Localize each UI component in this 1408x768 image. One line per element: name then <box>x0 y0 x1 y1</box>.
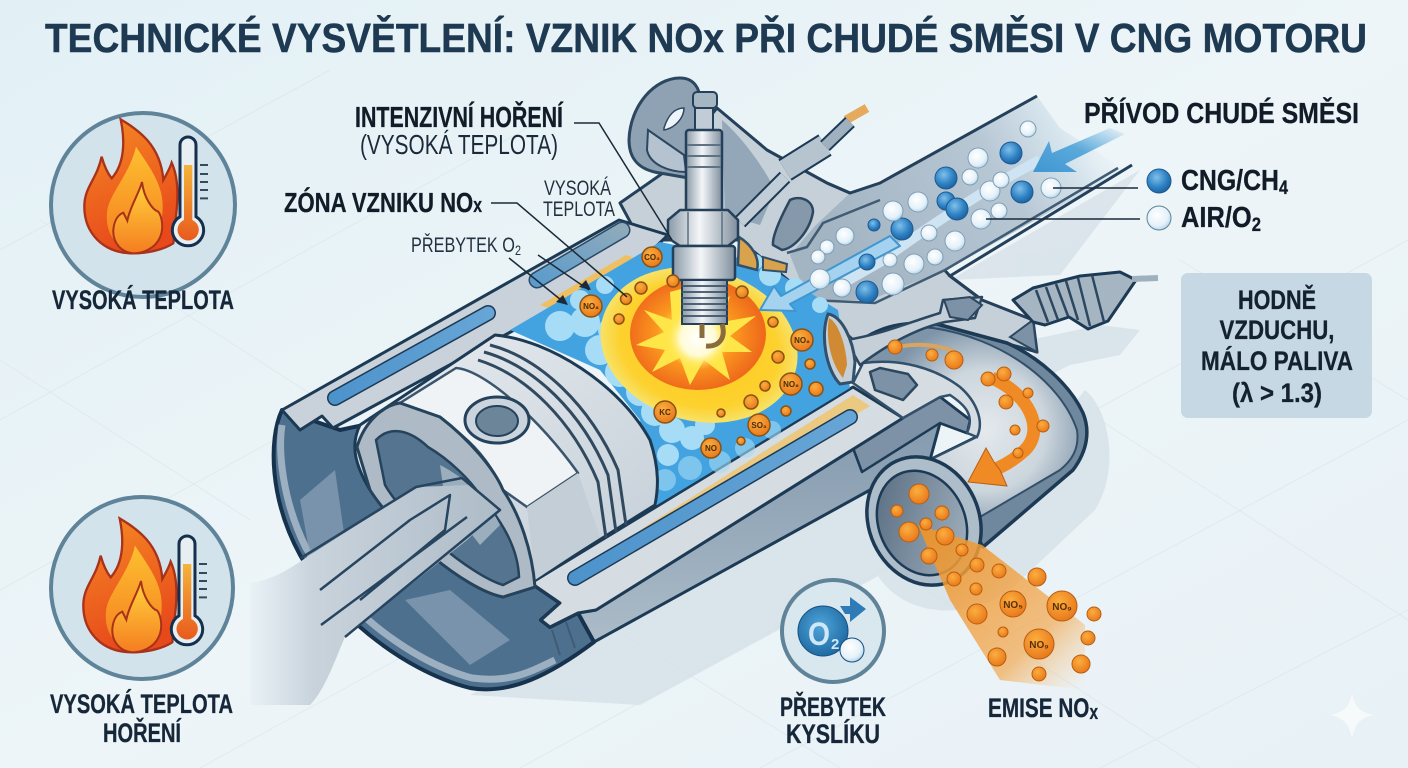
cylinder shell opening <box>274 400 594 689</box>
sensor and wire <box>740 108 867 222</box>
legend: CNG and air: CNG/CH <box>1181 165 1295 197</box>
callout: high temperature small: TEPLOTA <box>543 198 615 221</box>
exhaust flare <box>846 438 1002 604</box>
piston rings <box>478 345 626 538</box>
combustion chamber <box>510 242 850 505</box>
panel: lots of air, little fuel <box>1181 273 1372 418</box>
piston skirt face <box>400 368 578 507</box>
emitted NOx labels: NO₅ <box>1003 600 1023 611</box>
legend: CNG and air: 2 <box>1252 215 1261 236</box>
legend: CNG and air: 4 <box>1279 178 1288 199</box>
callout: high temperature small <box>543 177 615 221</box>
cylinder shell highlights <box>300 470 510 665</box>
callout: intensive combustion: INTENZIVNÍ HOŘENÍ <box>355 100 564 134</box>
blue slot: lower wall <box>575 417 850 578</box>
callout: excess oxygen small <box>411 234 591 305</box>
particle labels in chamber <box>583 253 810 453</box>
spark plug <box>668 92 738 346</box>
particle labels in chamber: NO <box>705 444 717 453</box>
particle labels in chamber: CO₃ <box>644 253 660 262</box>
label: high temperature: VYSOKÁ TEPLOTA <box>52 284 234 315</box>
panel: lots of air, little fuel: VZDUCHU, <box>1220 315 1334 345</box>
icon: excess oxygen: 2 <box>831 636 839 653</box>
exhaust plume <box>918 525 1085 690</box>
callout: intensive combustion <box>355 100 672 240</box>
arrow: mixture entering the cylinder <box>760 236 900 311</box>
piston pin hole <box>465 397 529 443</box>
connecting rod <box>250 478 500 705</box>
intake air flow and bubbles <box>760 121 1061 311</box>
label: combustion high temperature: HOŘENÍ <box>103 717 182 748</box>
exhaust pipe <box>853 323 1087 547</box>
label: excess oxygen: PŘEBYTEK <box>780 691 886 722</box>
lower cylinder wall <box>550 397 970 665</box>
label: excess oxygen: KYSLÍKU <box>786 718 880 749</box>
particle labels in chamber: NO₈ <box>783 380 799 389</box>
watermark sparkle <box>1330 693 1374 738</box>
particle labels in chamber: KC <box>659 408 671 417</box>
legend: CNG and air: AIR/O <box>1181 202 1262 234</box>
lower wall top face <box>531 387 903 627</box>
particle labels in chamber: SO₃ <box>751 421 767 430</box>
label: NOx emissions: x <box>1089 702 1098 724</box>
intake pipe <box>787 96 1132 303</box>
panel: lots of air, little fuel: MÁLO PALIVA <box>1201 345 1353 376</box>
legend: CNG and air <box>986 165 1288 236</box>
emitted NOx labels: NO₉ <box>1052 602 1072 613</box>
callout: NOx formation zone <box>284 187 627 297</box>
particle labels in chamber: NO₈ <box>583 302 599 311</box>
foam: cool air bubbles <box>545 254 828 491</box>
curved flow arrow <box>895 345 1034 486</box>
head dome <box>722 120 775 225</box>
panel: lots of air, little fuel: (λ > 1.3) <box>1232 378 1322 408</box>
icon: excess oxygen: O <box>808 616 830 652</box>
callout: excess oxygen small: PŘEBYTEK O <box>411 234 545 257</box>
piston ring opening <box>357 403 535 597</box>
callout: excess oxygen small: 2 <box>515 242 521 258</box>
label: excess oxygen <box>780 691 886 749</box>
flange behind the spark plug <box>629 78 700 180</box>
panel: lots of air, little fuel: HODNĚ <box>1238 284 1316 315</box>
label: combustion high temperature <box>50 688 233 748</box>
intake valve <box>738 237 787 272</box>
label: combustion high temperature: VYSOKÁ TEPLOTA <box>50 688 233 719</box>
emitted NOx labels: NO₉ <box>1029 640 1049 651</box>
engine shadow <box>470 170 1140 705</box>
upper cylinder wall <box>282 220 668 430</box>
icon: excess oxygen <box>782 580 884 682</box>
callout: high temperature small: VYSOKÁ <box>544 177 611 200</box>
piston <box>355 335 657 597</box>
NOx particles in exhaust <box>888 340 1101 681</box>
icon: combustion high temperature (bottom) <box>51 497 233 679</box>
arrow: lean mixture intake <box>1033 128 1125 172</box>
emitted NOx labels <box>1003 600 1072 651</box>
exhaust hose connector <box>1010 272 1158 352</box>
heading: lean mixture intake: PŘÍVOD CHUDÉ SMĚSI <box>1084 96 1359 130</box>
callout: intensive combustion: (VYSOKÁ TEPLOTA) <box>360 129 558 160</box>
exhaust valve <box>824 297 982 384</box>
callout: NOx formation zone: ZÓNA VZNIKU NOx <box>284 187 482 218</box>
label: NOx emissions: EMISE NO <box>988 693 1120 723</box>
NOx particles in chamber <box>580 247 823 458</box>
oval slot in head <box>773 198 813 250</box>
cylinder head plate <box>620 108 1037 352</box>
icon: high temperature (top) <box>51 113 235 297</box>
particle labels in chamber: NO₈ <box>794 336 810 345</box>
